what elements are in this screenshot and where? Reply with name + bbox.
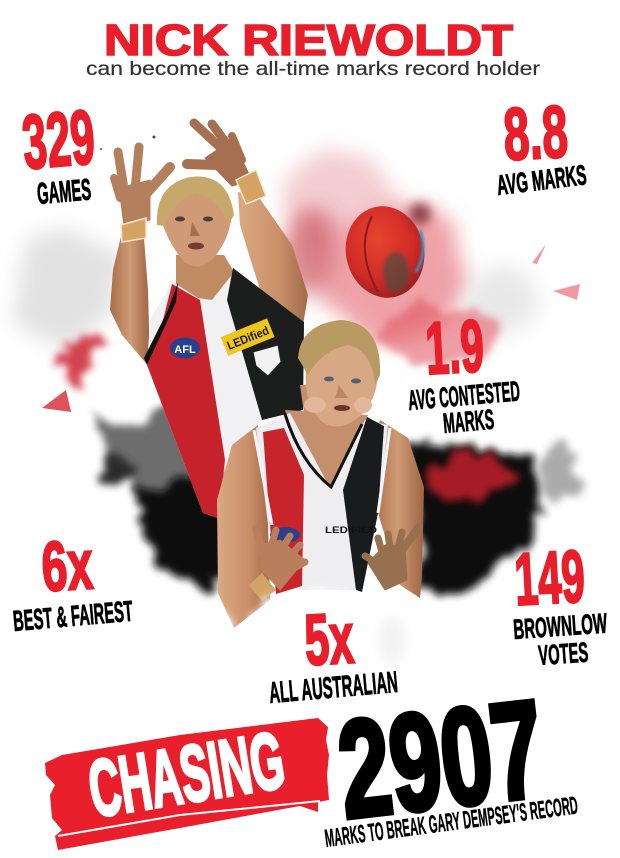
left raised arm	[110, 232, 150, 368]
right raised arm	[238, 192, 308, 325]
player 1: Nick Riewoldt	[110, 123, 308, 518]
football	[337, 199, 433, 305]
jersey black panel	[343, 417, 384, 592]
smoke: white cloud right	[396, 357, 540, 433]
smoke: grey left cloud	[20, 227, 120, 343]
jersey badge	[270, 527, 300, 543]
chasing brush banner	[45, 715, 329, 850]
title	[86, 16, 541, 80]
AFL badge	[170, 338, 200, 358]
heading: name: NICK RIEWOLDT	[104, 16, 513, 65]
right arm	[372, 420, 424, 598]
jersey black panel	[227, 268, 304, 420]
smoke: white cloud left	[84, 345, 172, 425]
left hand	[114, 147, 170, 226]
sponsor strip: LEDIFIED	[325, 525, 378, 535]
hair	[298, 320, 380, 385]
stat: 1.9 avg contested marks: MARKS	[442, 404, 495, 439]
smoke: grey right cloud	[464, 264, 536, 336]
speckles and shards	[42, 136, 580, 412]
white stripe in brush	[58, 801, 320, 836]
stat: 149 brownlow votes	[512, 534, 608, 671]
record target	[323, 672, 580, 853]
left wristband	[121, 218, 146, 242]
stat: 5x all australian: ALL AUSTRALIAN	[268, 666, 399, 710]
stat: 6x best and fairest	[12, 525, 134, 638]
smoke: dark red near arm	[280, 210, 340, 290]
stat: 8.8 avg marks: 8.8	[501, 90, 570, 176]
red brush stroke	[45, 718, 329, 850]
chest	[285, 410, 368, 490]
hair	[157, 176, 234, 226]
collar trim	[285, 414, 362, 487]
left wristband	[249, 573, 276, 601]
smoke: dark left wisp	[97, 454, 133, 486]
head	[157, 176, 234, 266]
player 2: Nick's brother	[217, 320, 424, 628]
stat: 1.9 avg contested marks: 1.9	[423, 304, 486, 390]
Saints crest	[253, 345, 281, 376]
AFL badge: AFL	[174, 344, 196, 356]
smoke: pink cloud upper right	[277, 153, 393, 257]
stat: 329 games	[19, 94, 98, 211]
right hand	[365, 527, 419, 590]
smoke: red cloud behind ball	[325, 207, 465, 343]
left arm	[217, 425, 270, 628]
jersey white	[256, 413, 388, 590]
shard: right	[553, 284, 580, 300]
smoke: black right cloud	[405, 440, 545, 590]
stat: 6x best and fairest: 6x	[40, 525, 95, 606]
smoke: black left cloud	[135, 470, 240, 590]
jersey left black trim	[144, 282, 178, 365]
stat: 5x all australian	[268, 599, 399, 710]
smoke: red left patch	[59, 334, 111, 386]
jersey red panel	[263, 428, 304, 594]
LEDified sponsor patch: LEDified	[225, 323, 271, 353]
stat: 8.8 avg marks	[495, 90, 588, 201]
smoke: grey right edge	[540, 449, 580, 501]
jersey red panel	[147, 284, 225, 518]
smoke: red streak by contested marks	[380, 307, 500, 363]
background smoke	[20, 153, 580, 590]
shard: left	[42, 390, 71, 412]
foreground white smoke	[177, 596, 415, 664]
stat: 6x best and fairest: BEST & FAIREST	[12, 596, 134, 638]
smoke: grey upper black left	[100, 400, 210, 500]
subheading: can become the all-time marks record holder	[86, 58, 541, 80]
left hand	[256, 528, 305, 590]
stat: 329 games: 329	[19, 94, 98, 186]
neck and head	[298, 320, 380, 437]
right wristband	[236, 170, 266, 204]
torso base	[147, 268, 304, 518]
stat: 5x all australian: 5x	[303, 599, 356, 681]
right hand	[187, 123, 252, 186]
smoke: dark red right glow	[426, 452, 514, 504]
chasing label: CHASING	[83, 715, 290, 834]
stat: 329 games: GAMES	[36, 173, 92, 211]
shard: top right	[532, 244, 546, 264]
neck	[176, 255, 234, 300]
stat: 1.9 avg contested marks	[407, 304, 521, 439]
